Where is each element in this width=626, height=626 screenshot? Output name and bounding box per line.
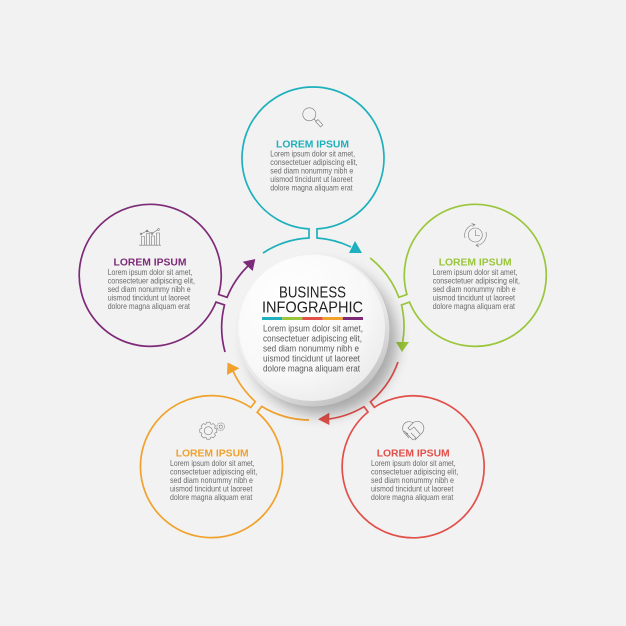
text block: orange: consectetuer adipiscing elit,: [170, 468, 257, 476]
text block: green: consectetuer adipiscing elit,: [433, 276, 520, 286]
color stripe: [262, 317, 363, 320]
heading: green: LOREM IPSUM: [439, 258, 512, 269]
text block: red: uismod tincidunt ut laoreet: [371, 484, 454, 494]
text block: orange: sed diam nonummy nibh e: [170, 476, 253, 485]
text block: green: [433, 268, 520, 311]
text block: purple: consectetuer adipiscing elit,: [108, 276, 195, 286]
panel: teal step: [242, 87, 384, 253]
panel: green step: [370, 204, 546, 352]
text block: orange: Lorem ipsum dolor sit amet,: [170, 459, 255, 468]
red outline and arrow: [318, 362, 484, 538]
text block: red: Lorem ipsum dolor sit amet,: [371, 459, 456, 468]
text block: teal: consectetuer adipiscing elit,: [270, 158, 358, 167]
text block: teal: sed diam nonummy nibh e: [270, 167, 354, 176]
icon: magnifier: [303, 108, 323, 127]
panel: orange step: [140, 362, 309, 538]
text block: red: dolore magna aliquam erat: [371, 493, 454, 502]
heading: teal: LOREM IPSUM: [276, 140, 349, 151]
disc shadow: [247, 265, 397, 415]
center text block: uismod tincidunt ut laoreet: [263, 354, 360, 364]
panel: center disc: [238, 254, 397, 415]
text block: orange: [170, 459, 257, 502]
center text block: dolore magna aliquam erat: [263, 364, 360, 374]
purple outline and arrow: [79, 204, 255, 352]
heading: red: LOREM IPSUM: [377, 449, 450, 460]
text block: green: uismod tincidunt ut laoreet: [433, 294, 516, 302]
text block: red: consectetuer adipiscing elit,: [371, 468, 458, 476]
text block: green: Lorem ipsum dolor sit amet,: [433, 268, 517, 277]
orange outline and arrow: [140, 362, 309, 538]
panel: red step: [318, 362, 484, 538]
icon: gears: [200, 422, 224, 439]
icon: bar chart: [139, 229, 161, 245]
icon: clock with arrows: [465, 224, 486, 247]
center title: INFOGRAPHIC: [262, 300, 363, 316]
teal outline and arrow: [242, 87, 384, 253]
text block: purple: [108, 268, 195, 311]
center text block: consectetuer adipiscing elit,: [263, 334, 362, 344]
icon: handshake heart: [403, 421, 424, 440]
panel: purple step: [79, 204, 255, 352]
text block: purple: uismod tincidunt ut laoreet: [108, 294, 191, 302]
text block: purple: Lorem ipsum dolor sit amet,: [108, 268, 192, 277]
green outline and arrow: [370, 204, 546, 352]
center text block: Lorem ipsum dolor sit amet,: [263, 324, 363, 334]
center title: [262, 284, 363, 316]
text block: purple: sed diam nonummy nibh e: [108, 285, 191, 294]
text block: teal: dolore magna aliquam erat: [270, 184, 353, 193]
disc rim: [238, 254, 390, 406]
center text block: [263, 324, 363, 374]
text block: orange: dolore magna aliquam erat: [170, 493, 253, 502]
text block: orange: uismod tincidunt ut laoreet: [170, 484, 253, 494]
center title: BUSINESS: [279, 284, 346, 302]
heading: purple: LOREM IPSUM: [114, 258, 186, 269]
text block: red: [371, 459, 458, 502]
disc face: [239, 255, 385, 401]
text block: teal: Lorem ipsum dolor sit amet,: [270, 150, 355, 159]
center text block: sed diam nonummy nibh e: [263, 344, 359, 354]
text block: teal: uismod tincidunt ut laoreet: [270, 175, 353, 184]
text block: red: sed diam nonummy nibh e: [371, 476, 454, 485]
text block: green: sed diam nonummy nibh e: [433, 285, 516, 294]
text block: green: dolore magna aliquam erat: [433, 302, 516, 311]
heading: orange: LOREM IPSUM: [176, 449, 249, 460]
text block: purple: dolore magna aliquam erat: [108, 302, 191, 311]
text block: teal: [270, 150, 358, 193]
